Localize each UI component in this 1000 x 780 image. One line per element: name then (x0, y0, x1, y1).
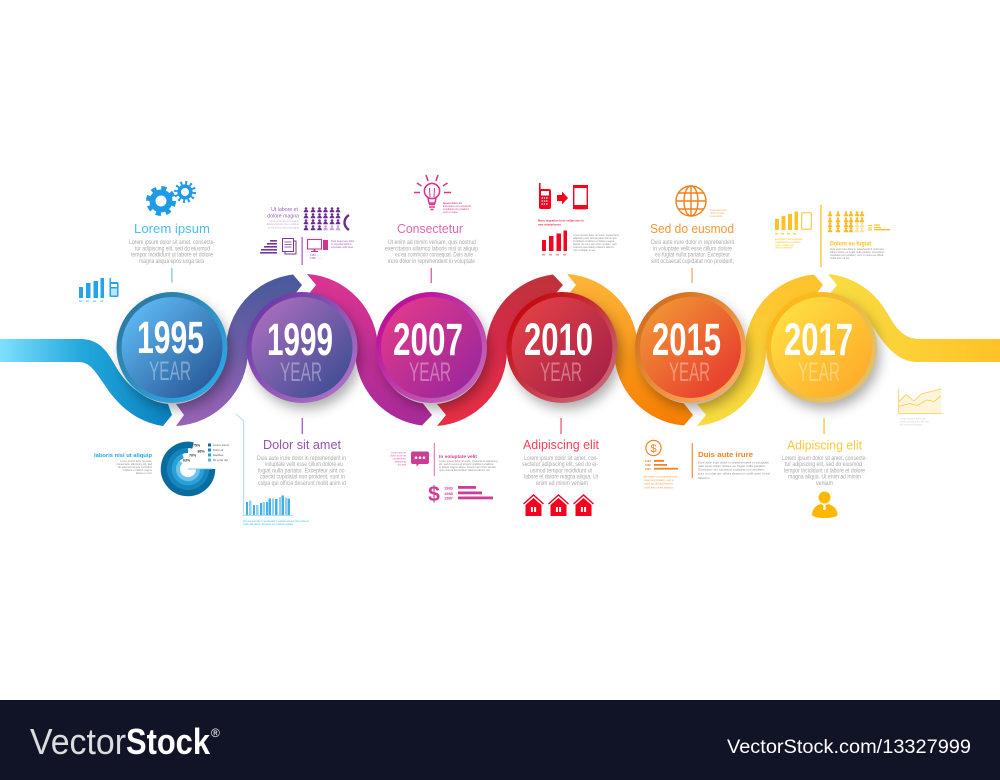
small text: ut labore et dolore magna (122, 468, 153, 472)
badge 2015 (635, 292, 749, 409)
arrow (557, 192, 568, 204)
divider line (302, 237, 303, 265)
small text: voluptate velit esse (331, 245, 354, 249)
panel: Sed do eusmod (2015) (650, 186, 734, 283)
small text: officia deserunt (775, 246, 793, 250)
small text (644, 474, 678, 490)
body text (257, 455, 346, 487)
year badges (116, 292, 880, 409)
caption: new smartphones (538, 222, 561, 226)
body text: usmod tempor incididunt ut (530, 467, 592, 474)
small text (830, 247, 884, 260)
small text: aliqua ut enim (136, 471, 152, 475)
small text: adipiscing elit, sed do eiusmod tempor (573, 236, 617, 240)
chart: year bars: 1985 (645, 463, 651, 467)
heading: Duis aute irure (698, 450, 753, 459)
body text: eu fugiat nulla pariatur. Excepteur (655, 252, 730, 259)
small text: et dolore magna aliqua. Ut enim ad minim veniam (439, 465, 496, 469)
small text: in reprehenderit in (331, 242, 352, 246)
badge 1999: 1999 (267, 314, 333, 365)
ribbon segment: purple (176, 274, 302, 426)
small text (310, 239, 354, 260)
body text: Ut enim ad minim veniam, quis nostrud (388, 239, 476, 246)
small text: dolor sit amet (390, 454, 406, 458)
chart: year bars: 1983 (444, 486, 454, 490)
small text: adipiscing (394, 460, 407, 464)
small text: Lorem ipsum dolor sit amet, consectetur (573, 233, 619, 237)
chart: line chart (right): Lorem ipsum dolor sit (900, 416, 925, 420)
connector (171, 268, 173, 282)
small text: culpa qui officia deserunt (644, 482, 673, 486)
heading: Dolor sit amet (263, 437, 341, 452)
small text: Duis aute irure dolor in reprehenderit velit esse (830, 247, 884, 251)
panel: Duis aute irure (bottom of 2015) (644, 440, 770, 490)
body text: labore et dolore magna aliqua. Ut (524, 474, 598, 481)
chart: blue bar chart: fugiat nulla pariatur. Excepteur sint occaecat cupidatat (243, 522, 293, 526)
heading: Adipiscing elit (523, 437, 599, 452)
chart: year bars: 1985 (444, 491, 454, 496)
small text (266, 219, 300, 229)
heading (267, 207, 299, 220)
small text (390, 450, 407, 466)
ribbon segment: magenta (307, 274, 432, 426)
icon: phone (802, 213, 811, 229)
small text: mollit anim id est laborum (644, 486, 673, 490)
donut chart (164, 445, 212, 493)
panel: purple stats (top of 1999) (260, 207, 354, 265)
badge 2010: YEAR (540, 357, 582, 387)
badge 1995: 1995 (137, 312, 204, 363)
chart: line chart (right): do eiusmod tempor (900, 422, 922, 426)
small text: velit esse cillum dolore eu fugiat nulla pariatur. (698, 464, 766, 468)
small text: datat non proident, sunt in (644, 478, 675, 482)
chart: year bars (645, 459, 678, 471)
small text: quis nostrud exercitation ullamco laboris nisi (439, 468, 490, 472)
percent labels: 75% (193, 444, 201, 448)
chart: year bars: 1987 (444, 496, 454, 500)
small text: cillum dolore eu fugiat nulla pariatur. Excepteur (830, 250, 884, 254)
badge 2007: YEAR (409, 357, 451, 387)
small text (573, 233, 619, 252)
small text: Ipsum dolor sit (443, 201, 462, 205)
body text: sectetur adipiscing elit, sed do ei- (522, 461, 598, 468)
panel: red phones (top of 2010) (538, 183, 619, 256)
body text: enim ad minim veniam (536, 480, 588, 487)
caption: Mass migration from cellphones to (538, 218, 584, 222)
panel: donut chart (bottom of 1995) (94, 443, 230, 493)
badge 1995: YEAR (149, 356, 191, 386)
small text: Excepteur sint occaecat cupi- (644, 474, 678, 478)
badge 2017: 2017 (784, 314, 853, 365)
icon: computer (308, 240, 328, 252)
small text: aliqua. Ut enim ad minim veniam, quis (573, 242, 618, 246)
small text: consectetur (393, 456, 406, 460)
connector (691, 268, 693, 283)
panel: Adipiscing elit (2010) (522, 418, 599, 516)
percent labels (183, 444, 205, 462)
ribbon segment: yellow (697, 274, 823, 426)
heading: Adipiscing elit (787, 438, 862, 452)
panel: Dolor sit amet (1999) (236, 414, 346, 526)
small text (443, 201, 471, 214)
ribbon segment: orange (567, 274, 693, 426)
chart: yellow bars (775, 212, 798, 234)
body text: fugiat nulla pariatur. Excepteur sint oc- (258, 467, 346, 474)
small text (439, 459, 498, 472)
connector (823, 418, 825, 434)
small text: sunt in culpa qui officia deserunt mollit anim id est (698, 472, 770, 476)
panel: yellow stats (top of 2017) (775, 205, 890, 267)
badge 2015: 2015 (652, 314, 721, 365)
badge 1995 (116, 292, 231, 409)
badge 2017 (766, 292, 880, 409)
small text: 1983 .... (310, 253, 320, 257)
small text (698, 460, 770, 480)
small text: cupidatat non proident, sunt in culpa qui officia (830, 253, 884, 257)
body text (651, 239, 734, 265)
logo: VectorStock: Vector (30, 721, 126, 762)
icon: light bulb (414, 175, 451, 210)
chart: year bars: 1987 (645, 467, 651, 471)
body text: in voluptate velit esse cillum dolore (653, 245, 732, 252)
icon: stepped bars (260, 240, 277, 254)
body text: culpa qui officia deserunt mollit anim id (258, 480, 346, 487)
body text: veniam (816, 480, 833, 487)
body text: voluptate velit esse cillum dolore eu (265, 461, 343, 468)
connector (302, 418, 303, 434)
panel: Consectetur (2007) (385, 175, 478, 283)
ribbon segment: yellow tail (828, 274, 1000, 362)
chart: red bars (542, 230, 567, 256)
small text (710, 208, 727, 218)
small text: elit, sed do eiusmod tempor incididunt ut labore (439, 462, 494, 466)
small text: laborum (698, 476, 710, 480)
small text: ex ea commodo consequat (268, 225, 299, 229)
body text: tur adipiscing elit, sed do eiusmod (135, 245, 210, 252)
badge 1999 (246, 292, 361, 409)
footer bar (0, 700, 1000, 780)
connector (431, 268, 432, 283)
icons: houses (524, 495, 594, 516)
body text: ex ea commodo consequat. Duis aute (395, 252, 473, 259)
small text: Excepteur sint occaecat (775, 237, 803, 241)
small text: 1985 ........ (310, 256, 323, 260)
chart: year bars (444, 486, 493, 500)
panel: Adipiscing elit (2017) (782, 418, 867, 518)
legend: Mi porta nisi (213, 458, 228, 462)
icon: dollar coin: $ (650, 443, 657, 455)
small text: Duis aute irure dolor in reprehenderit in voluptate (698, 460, 770, 464)
registered mark: ® (211, 726, 220, 740)
heading: Sed do eusmod (650, 221, 734, 236)
icon: people grid (304, 207, 340, 230)
small text: sunt in culpa (443, 210, 458, 214)
divider line (434, 443, 435, 476)
body text: tempor incididunt ut labore et dolore (784, 467, 865, 474)
divider line (692, 443, 693, 478)
small text: sunt in culpa qui (775, 243, 794, 247)
logo: VectorStock (30, 721, 211, 762)
icon: business person (812, 492, 838, 518)
small text: do eiusmod tempor incididunt (118, 465, 152, 469)
badge 2010 (506, 292, 621, 409)
timeline ribbon (0, 274, 1000, 426)
small text: Duis aute irure dolor (331, 239, 354, 243)
body text: Duis aute irure dolor in reprehenderit in (257, 455, 346, 462)
legend: Dapibus (213, 453, 224, 457)
percent labels: 86% (198, 450, 205, 454)
icon: document (282, 238, 296, 254)
body text (129, 239, 215, 265)
icon: gears (148, 183, 194, 214)
icon: people grid (828, 211, 864, 232)
small text: incididunt ut labore et dolore magna (573, 239, 615, 243)
body text: tempor incididunt ut labore et dolore (131, 252, 213, 259)
chart: year bars: 1983 (645, 459, 651, 463)
percent labels: 70% (189, 454, 197, 458)
legend: Dolor sit (213, 448, 223, 452)
chart: line chart (right): amet consectetur elit sed (900, 420, 929, 424)
body text: Lorem ipsum dolor sit amet, consecte- (782, 455, 867, 462)
heading: Dolore eu fugiat (830, 240, 872, 248)
body text: Lorem ipsum dolor sit amet, con- (524, 455, 598, 462)
small text: elit sed (398, 462, 407, 466)
small text: nisi ut aliquip ex ea (573, 248, 596, 252)
stock id: VectorStock.com/13327999 (727, 737, 971, 758)
caption (538, 218, 584, 226)
small text: dolor in velit (710, 211, 724, 215)
small text: nostrud exercitation ullamco laboris (573, 245, 614, 249)
body text: exercitation ullamco laboris nisi ut aliquip (385, 245, 478, 252)
badge 2007: 2007 (393, 314, 463, 365)
badge 2015: YEAR (669, 357, 710, 387)
heading: laboris nisi ut aliquip (94, 453, 152, 459)
legend bars (868, 224, 890, 230)
small text: Quis nostrud exercitation (270, 219, 300, 223)
chart: line chart (right) (898, 389, 942, 426)
body text: irure dolor in reprehenderit in voluptate (388, 258, 475, 265)
heading: Consectetur (397, 221, 464, 236)
body text: magna aliqua epos unga tara (139, 258, 204, 265)
small text: ullamco laboris nisi ut aliquip (266, 222, 300, 226)
body text (522, 455, 598, 487)
chart: blue bar chart: Duis aute irure dolor in reprehenderit in voluptate velit esse cillum dolore eu (243, 519, 309, 523)
chart: signal bars and phone (79, 278, 118, 302)
logo: VectorStock: Stock (126, 721, 211, 762)
icon: old cell phone (539, 183, 551, 209)
panel: In voluptate velit (bottom of 2007) (390, 443, 498, 506)
body text (385, 239, 478, 265)
small text (117, 459, 153, 475)
badge 1999: YEAR (280, 357, 322, 387)
body text (782, 455, 867, 487)
small text: mollit anim id est (830, 256, 850, 260)
icon: dollar sign: $ (428, 483, 440, 506)
small text: cupidatat non proident (775, 240, 801, 244)
badge 2007 (376, 292, 490, 409)
icon: speech bubble (411, 452, 429, 466)
body text: caecat cupidatat non proident, sunt in (260, 474, 345, 481)
body text: Lorem ipsum dolor sit amet, consecte- (129, 239, 215, 246)
divider line (820, 205, 822, 267)
body text: sint occaecat cupidatat non proident, (651, 258, 734, 265)
panel: Lorem ipsum (1995) (129, 183, 215, 282)
small text: Lorem ipsum (391, 450, 406, 454)
connector (560, 418, 562, 434)
body text: Duis aute irure dolor in reprehenderit (651, 239, 734, 246)
small text: Lorem ipsum dolor sit amet, consectetur adipiscing (439, 459, 498, 463)
small text: consectetur adipiscing elit, sed (117, 462, 153, 466)
small text (775, 237, 803, 250)
small text: Lorem ipsum dolor sit amet, (120, 459, 152, 463)
badge 2017: YEAR (798, 357, 840, 387)
percent labels: 63% (183, 458, 191, 462)
badge 2010: 2010 (524, 314, 593, 365)
legend: Lorem ipsum (213, 443, 230, 447)
heading: Ut labore et (271, 207, 299, 213)
heading: In voluptate velit (439, 454, 478, 459)
ribbon segment: blue (0, 339, 172, 426)
icon: smartphone (573, 185, 588, 209)
heading: dolore magna (267, 214, 299, 220)
ribbon segment: red (437, 274, 563, 426)
heading: Lorem ipsum (134, 221, 210, 236)
small text: Excepteur sint occaecat cupidatat non proident, (698, 468, 765, 472)
body text: magna aliqua. Ut enim ad minim (788, 474, 861, 481)
small text: Excepteur sint occaecat (443, 204, 471, 208)
chart: blue bar chart (236, 414, 309, 526)
small text: Duis aute irure (710, 208, 727, 212)
body text: tur adipiscing elit, sed do eiusmod (785, 461, 862, 468)
small text: cupidatat non proident (443, 207, 469, 211)
legend (208, 443, 230, 462)
icon: globe (676, 186, 706, 216)
icon: telephone (344, 215, 349, 230)
small text: esse cillum (710, 214, 723, 218)
